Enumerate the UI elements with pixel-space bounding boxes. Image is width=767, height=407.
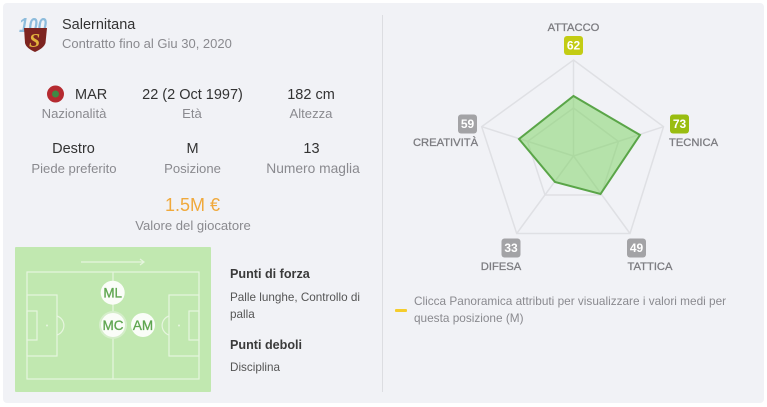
stat: height value: 182 cm <box>287 87 335 103</box>
radar chart: CREATIVITÀ <box>413 136 479 149</box>
radar chart: DIFESA <box>481 261 522 273</box>
radar chart: TATTICA <box>628 261 673 273</box>
radar chart: 59 <box>461 117 474 131</box>
stat: position label: Posizione <box>164 160 221 176</box>
radar chart: 49 <box>630 241 643 255</box>
radar chart: 62 <box>567 38 580 52</box>
radar chart: ATTACCO <box>548 22 600 34</box>
heading: weaknesses: Punti deboli <box>230 338 302 352</box>
stat: foot value: Destro <box>52 141 95 157</box>
stat: nationality label: Nazionalità <box>42 106 106 121</box>
pitch diagram: AM <box>133 318 153 333</box>
strengths text: Palle lunghe, Controllo di palla <box>230 291 360 321</box>
player value amount: 1.5M € <box>165 194 220 214</box>
radar chart: 33 <box>504 241 518 255</box>
stat: height label: Altezza <box>290 106 332 121</box>
pitch diagram: ML <box>103 286 123 300</box>
stat: nationality value: MAR <box>75 87 107 103</box>
contract text: Contratto fino al Giu 30, 2020 <box>62 36 232 51</box>
icon: club crest: S <box>29 30 40 52</box>
stat: shirt number value: 13 <box>303 141 320 157</box>
legend text: Clicca Panoramica attributi per visualizzare i valori medi per questa posizione (M) <box>414 294 726 325</box>
icon: club crest: 100 <box>19 15 47 37</box>
player value label: Valore del giocatore <box>135 218 251 233</box>
stat: position value: M <box>186 141 199 157</box>
stat: age value: 22 (2 Oct 1997) <box>142 87 243 103</box>
vertical divider <box>382 15 383 392</box>
heading: strengths: Punti di forza <box>230 267 310 281</box>
legend marker <box>395 309 407 312</box>
weaknesses text: Disciplina <box>230 361 280 374</box>
stat: foot label: Piede preferito <box>31 160 117 176</box>
stat: age label: Età <box>182 106 202 121</box>
pitch diagram: MC <box>102 318 124 333</box>
stat: shirt number label: Numero maglia <box>266 160 360 176</box>
club name: Salernitana <box>62 17 135 33</box>
radar chart: 73 <box>673 117 686 131</box>
radar chart: TECNICA <box>669 137 719 149</box>
